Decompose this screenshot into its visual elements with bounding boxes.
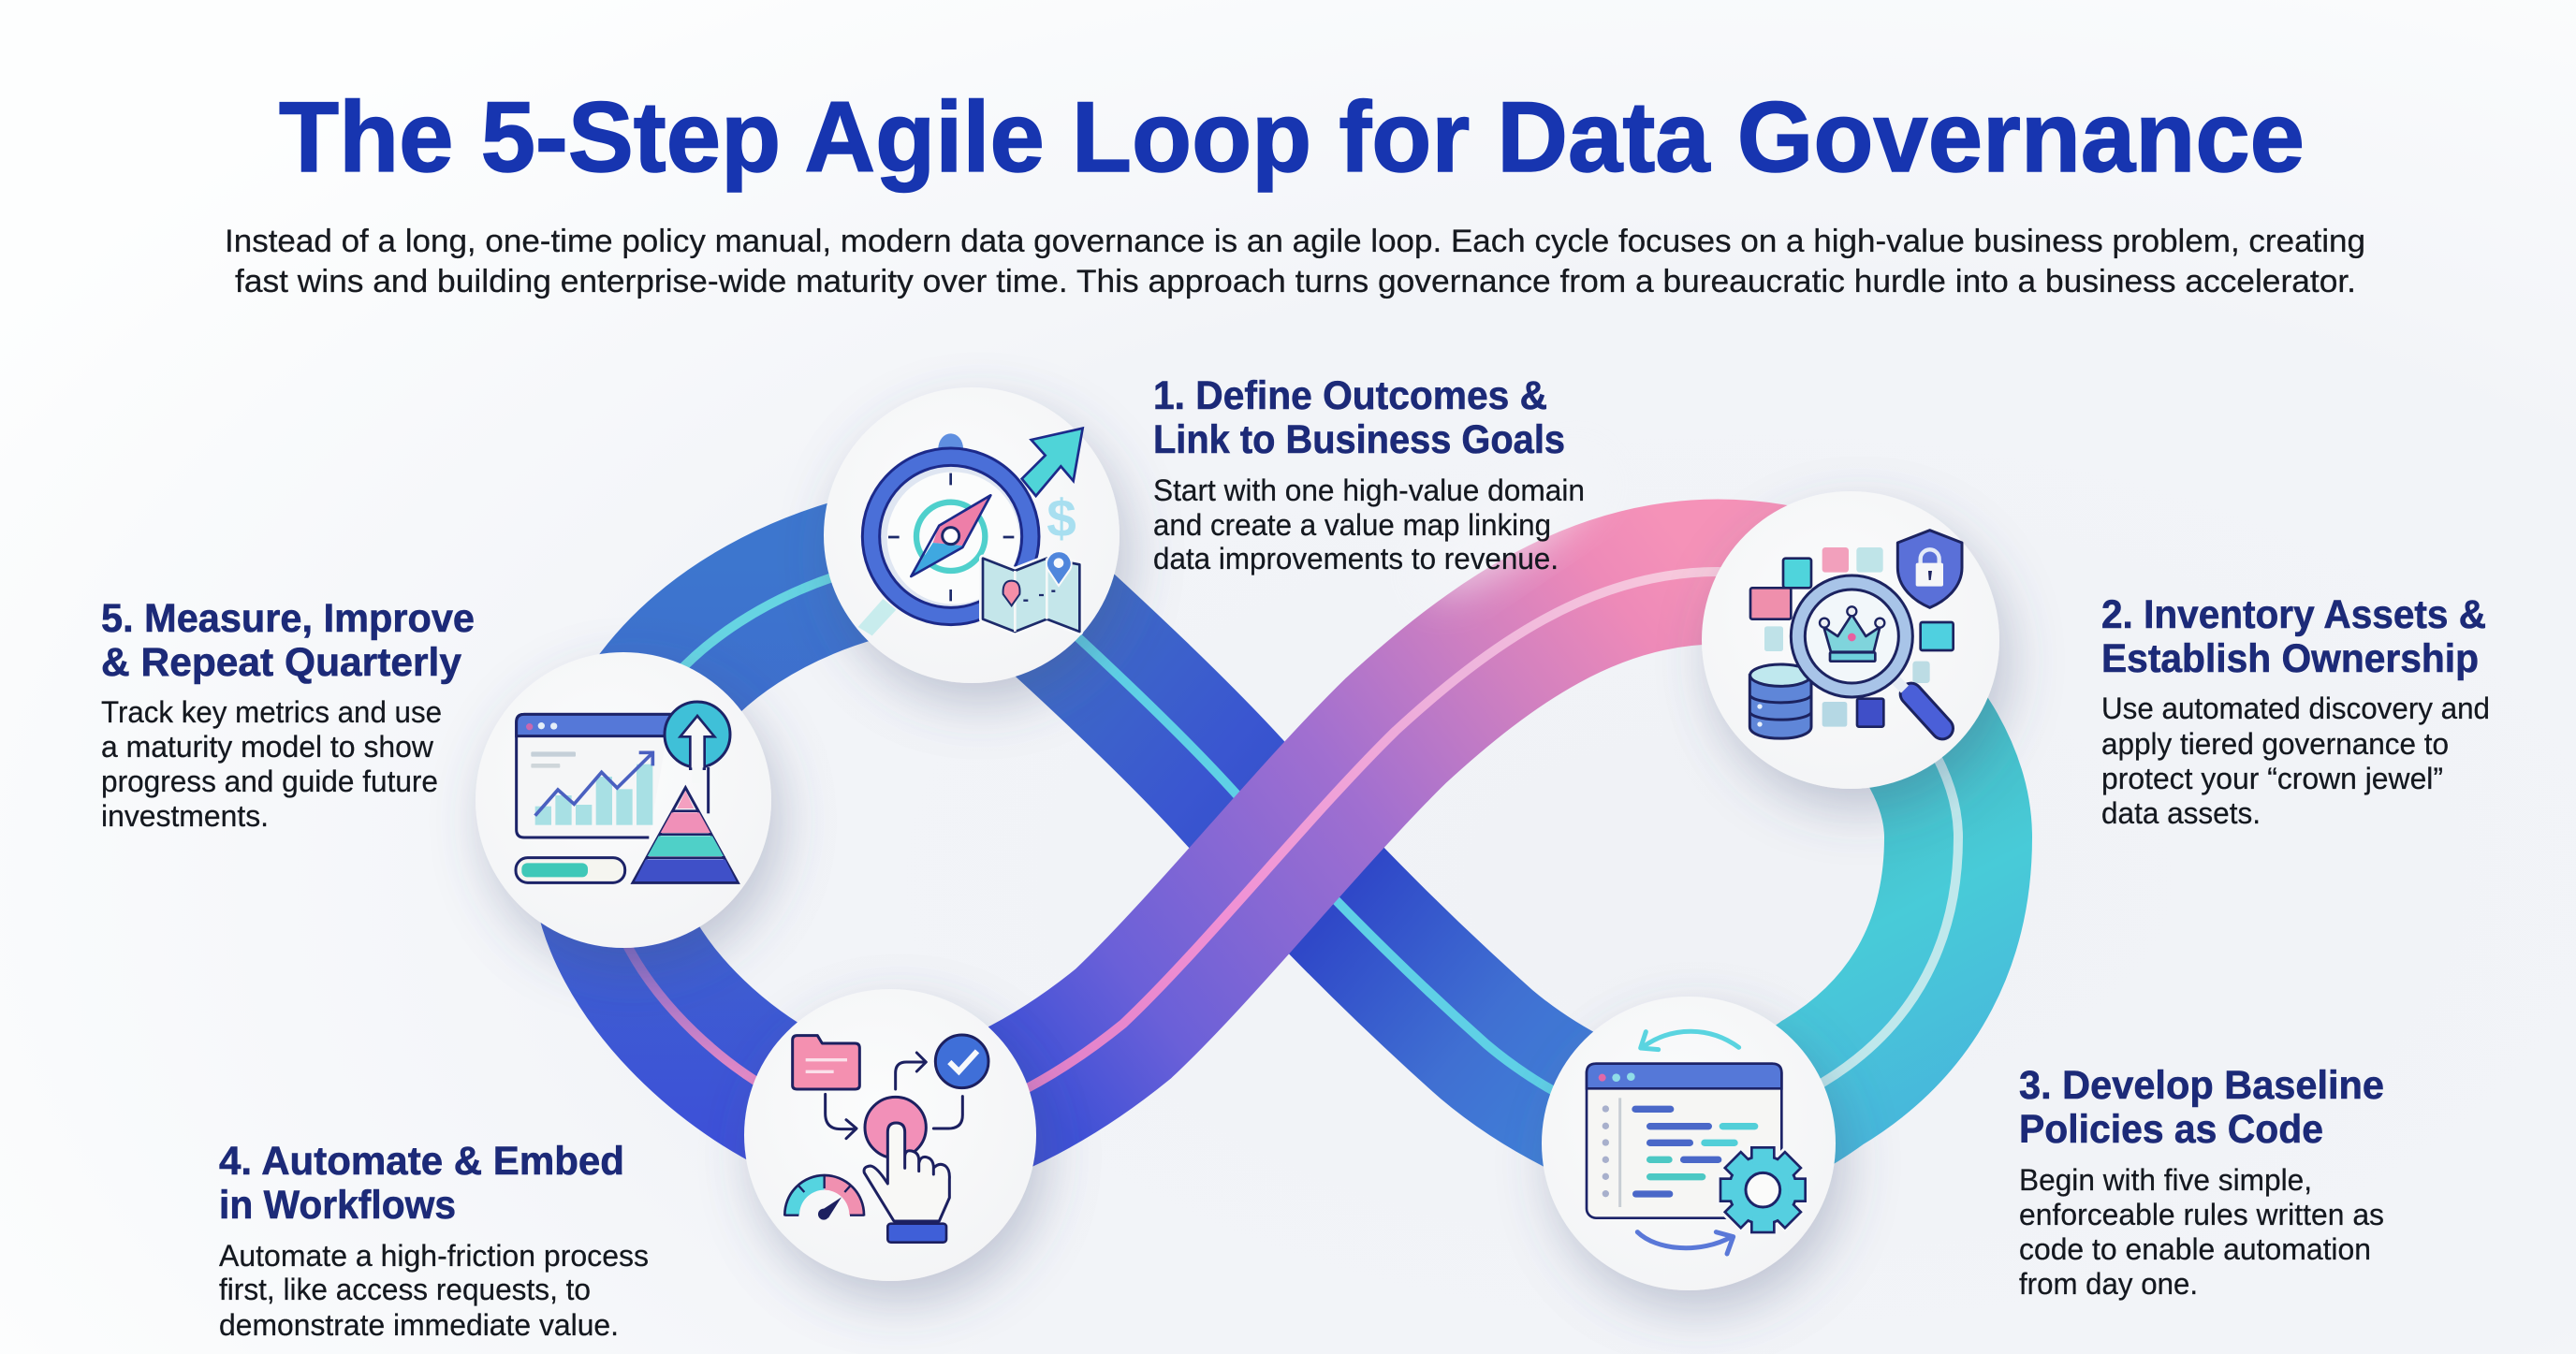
- icon: dollar sign: $: [1046, 489, 1076, 548]
- icon: progress bar: [516, 858, 625, 882]
- step 2 text: [2101, 592, 2490, 830]
- icon: database: [1749, 664, 1811, 738]
- icon: workflow arrows: [826, 1053, 962, 1139]
- step 5 description: progress and guide future: [101, 764, 438, 798]
- step 2 node: magnifier, crown, shield and database icon: [1702, 491, 1999, 789]
- step 2 description: data assets.: [2101, 796, 2261, 830]
- step 1 heading: 1. Define Outcomes &: [1153, 373, 1547, 418]
- step 2 description: [2101, 692, 2490, 830]
- step 5 heading: [101, 596, 475, 685]
- step 3 heading: 3. Develop Baseline: [2019, 1063, 2384, 1108]
- step 1 description: and create a value map linking: [1153, 508, 1551, 542]
- intro text: Instead of a long, one-time policy manual, modern data governance is an agile loop. Each cycle focuses on a high-value business problem, creating: [225, 224, 2365, 259]
- step 3 description: [2019, 1163, 2384, 1301]
- step 5 heading: & Repeat Quarterly: [101, 640, 461, 685]
- step 3 text: [2019, 1063, 2384, 1301]
- step 2 heading: Establish Ownership: [2101, 636, 2479, 681]
- step 5 heading: 5. Measure, Improve: [101, 596, 475, 641]
- icon: gear: [1721, 1149, 1804, 1231]
- step 4 description: demonstrate immediate value.: [219, 1308, 619, 1342]
- step 3 heading: [2019, 1063, 2384, 1152]
- icon: button and pointing hand: [864, 1097, 949, 1243]
- intro text: fast wins and building enterprise-wide maturity over time. This approach turns governance from a bureaucratic hurdle into a business accelerator.: [235, 264, 2356, 299]
- step 4 node: workflow, hand and gauge icon: [744, 989, 1036, 1281]
- icon: growth arrow: [1022, 429, 1083, 496]
- infinity loop ribbon: [604, 552, 1958, 1143]
- step 4 description: Automate a high-friction process: [219, 1239, 649, 1273]
- step 1 heading: Link to Business Goals: [1153, 417, 1565, 462]
- step 5 node: dashboard and maturity pyramid icon: [476, 652, 771, 948]
- icon: code window: [1587, 1064, 1781, 1218]
- icon: cycle arrows: [1637, 1031, 1739, 1254]
- step 5 description: investments.: [101, 799, 269, 833]
- step 2 heading: 2. Inventory Assets &: [2101, 592, 2486, 637]
- step 3 description: from day one.: [2019, 1267, 2198, 1301]
- title: The 5-Step Agile Loop for Data Governance: [279, 80, 2305, 193]
- step 4 heading: [219, 1139, 624, 1228]
- step 3 heading: Policies as Code: [2019, 1107, 2323, 1152]
- ribbon: teal right loop from step 2 to step 3: [1689, 655, 1958, 1143]
- icon: speed gauge: [784, 1175, 864, 1220]
- step 4 description: [219, 1239, 649, 1342]
- step 5 text: [101, 596, 475, 833]
- step 3 node: code window and gear icon: [1542, 997, 1836, 1290]
- ribbon: blue diagonal from step 1 to step 3: [992, 561, 1689, 1143]
- icon: folder: [793, 1036, 859, 1089]
- step 1 description: data improvements to revenue.: [1153, 542, 1559, 575]
- ribbon: purple to pink from step 4 to step 2: [890, 572, 1851, 1135]
- step 1 description: [1153, 473, 1585, 575]
- icon: data tiles: [1750, 547, 1954, 727]
- icon: maturity pyramid: [633, 788, 738, 882]
- step 4 description: first, like access requests, to: [219, 1273, 591, 1306]
- step 4 heading: 4. Automate & Embed: [219, 1139, 624, 1184]
- intro text: [225, 224, 2365, 299]
- icon: folded map: [983, 551, 1079, 632]
- step 2 description: protect your “crown jewel”: [2101, 762, 2443, 795]
- step 1 node: compass, arrow and map icon: [824, 387, 1120, 683]
- icon: compass: [862, 433, 1039, 625]
- icon: dashboard window with chart: [517, 714, 671, 837]
- step 4 heading: in Workflows: [219, 1183, 456, 1228]
- step 2 description: apply tiered governance to: [2101, 727, 2449, 761]
- step 1 heading: [1153, 373, 1565, 462]
- step 5 description: a maturity model to show: [101, 730, 434, 764]
- step 4 text: [219, 1139, 649, 1342]
- step 3 description: Begin with five simple,: [2019, 1163, 2312, 1197]
- step 1 description: Start with one high-value domain: [1153, 473, 1585, 507]
- step 3 description: code to enable automation: [2019, 1232, 2371, 1266]
- icon: check badge: [935, 1035, 988, 1088]
- step 5 description: [101, 695, 442, 833]
- icon: upward arrow badge: [665, 702, 730, 813]
- step 1 text: [1153, 373, 1585, 575]
- ribbon: left loop from step 1 through step 5 to step 4: [604, 552, 972, 1135]
- step 2 description: Use automated discovery and: [2101, 692, 2490, 725]
- icon: magnifying glass with crown: [1791, 575, 1942, 728]
- icon: shield with lock: [1897, 531, 1962, 607]
- step 5 description: Track key metrics and use: [101, 695, 442, 729]
- step 2 heading: [2101, 592, 2486, 681]
- step 3 description: enforceable rules written as: [2019, 1198, 2384, 1231]
